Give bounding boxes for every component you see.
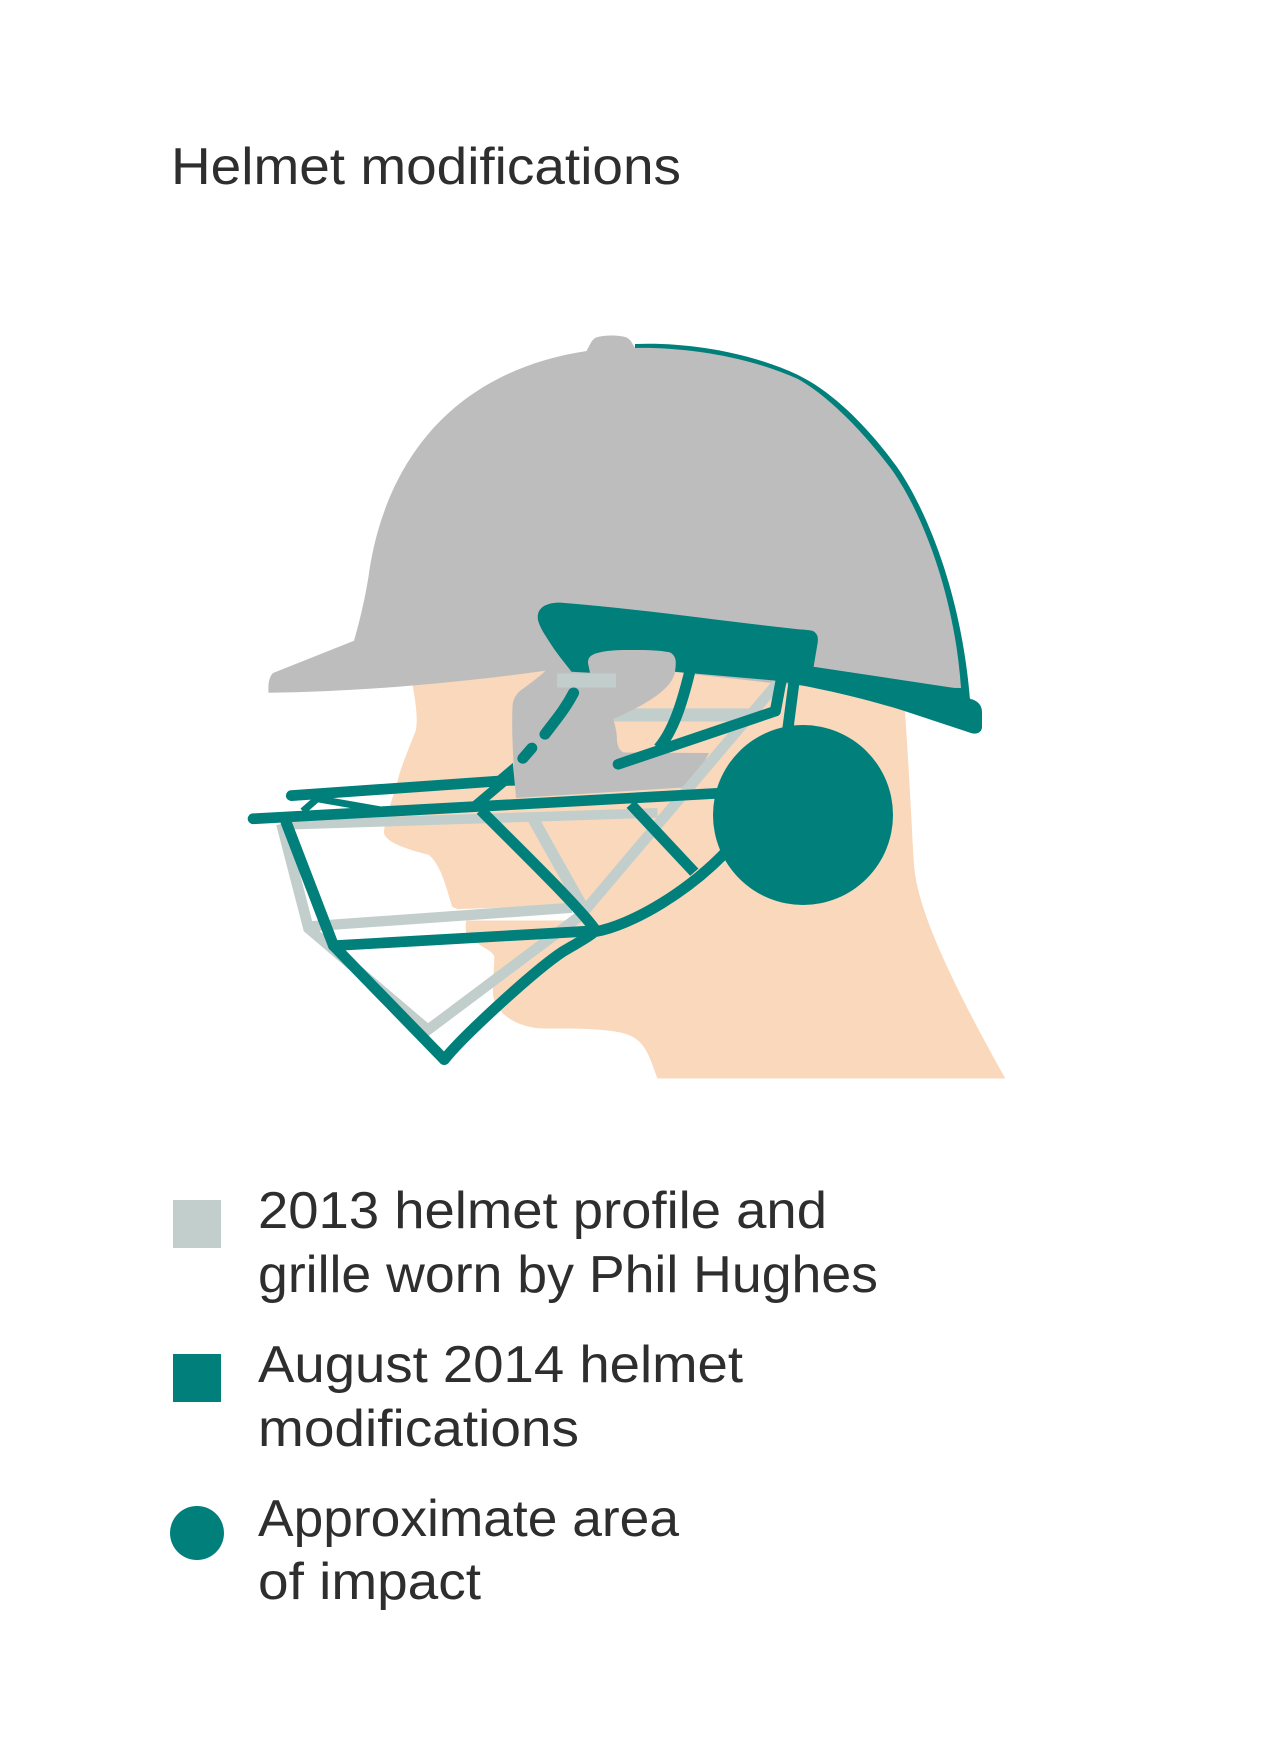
side strap <box>618 681 781 764</box>
helmet shell <box>268 336 961 798</box>
chin curve <box>444 843 734 1060</box>
legend item: 2013 helmet <box>173 1182 878 1304</box>
front brace <box>303 799 388 811</box>
2013 grille <box>281 684 777 1030</box>
upper bar bracket <box>498 763 515 786</box>
August 2014 peak band <box>538 603 982 734</box>
helmet diagram <box>253 336 1005 1079</box>
rear diagonal <box>631 804 694 872</box>
small diagonal <box>475 781 504 806</box>
legend item: August 2014 <box>173 1336 744 1458</box>
August 2014 grille <box>253 672 794 1060</box>
legend item: impact area <box>170 1490 679 1611</box>
legend item: August 2014: August 2014 helmet <box>258 1336 744 1394</box>
main bar <box>253 793 720 819</box>
light brow bar <box>557 674 616 688</box>
title: Helmet modifications <box>171 138 681 196</box>
upper bar <box>291 781 502 796</box>
rear strut <box>788 682 794 729</box>
legend item: impact area: of impact <box>258 1553 482 1611</box>
impact circle <box>713 725 893 905</box>
legend <box>170 1182 878 1611</box>
side strut <box>659 672 690 748</box>
legend item: impact area: Approximate area <box>258 1490 679 1548</box>
legend item: 2013 helmet: 2013 helmet profile and <box>258 1182 827 1240</box>
lower bar <box>334 931 593 946</box>
helmet shell outline <box>635 344 970 700</box>
head silhouette <box>384 629 1005 1079</box>
legend item: August 2014: modifications <box>258 1400 579 1458</box>
front vertical <box>286 822 444 1060</box>
dashed brow wire <box>523 693 574 758</box>
2013 upper cross bar <box>613 696 752 734</box>
mid diagonal <box>481 810 594 928</box>
legend item: 2013 helmet: grille worn by Phil Hughes <box>258 1246 878 1304</box>
